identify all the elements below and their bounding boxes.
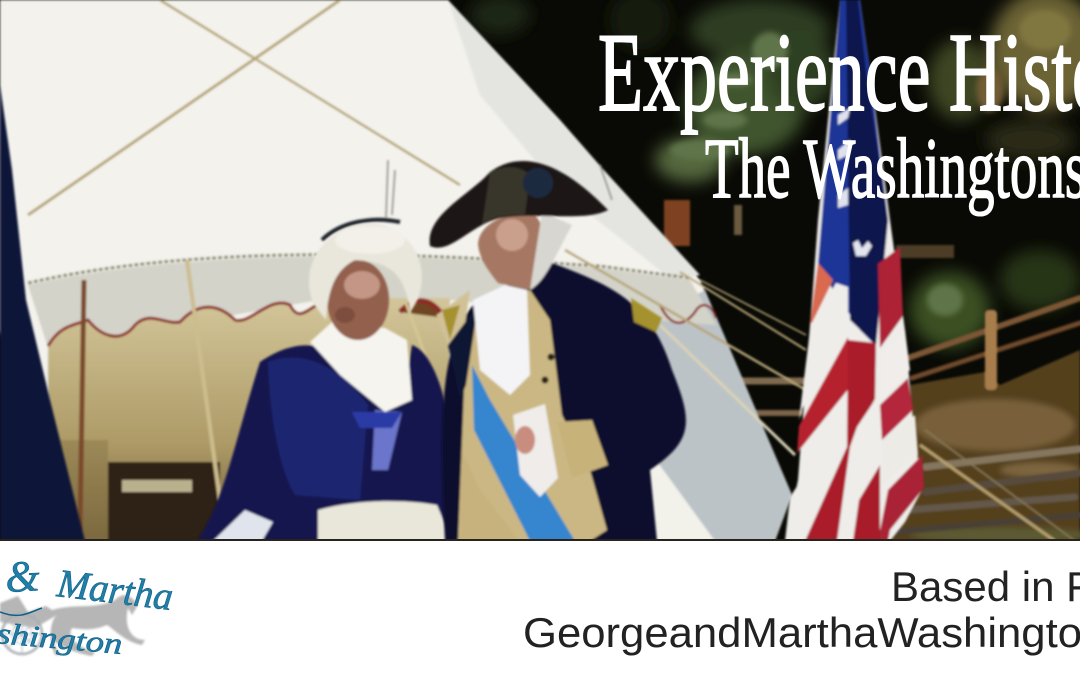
trees behind the camp bbox=[470, 0, 1080, 348]
tent valance bbox=[28, 257, 716, 348]
American flag bbox=[785, 0, 924, 541]
logo script text: Martha bbox=[54, 560, 176, 619]
man in Continental uniform bbox=[430, 161, 686, 541]
bottom edge of photo bbox=[0, 539, 1080, 541]
logo script text: & bbox=[4, 551, 41, 602]
icon: horse and carriage silhouette bbox=[0, 595, 145, 656]
tent inner wall bbox=[48, 298, 450, 541]
logo: George & Martha Washington with horse and carriage bbox=[0, 551, 176, 661]
ground and fence bbox=[664, 200, 1080, 543]
subtitle: The Washingtons: The Washingtons bbox=[705, 121, 1080, 216]
woman in blue gown bbox=[197, 220, 460, 541]
logo script text bbox=[0, 551, 176, 661]
flag on left edge bbox=[0, 85, 85, 541]
tent bbox=[0, 0, 806, 541]
